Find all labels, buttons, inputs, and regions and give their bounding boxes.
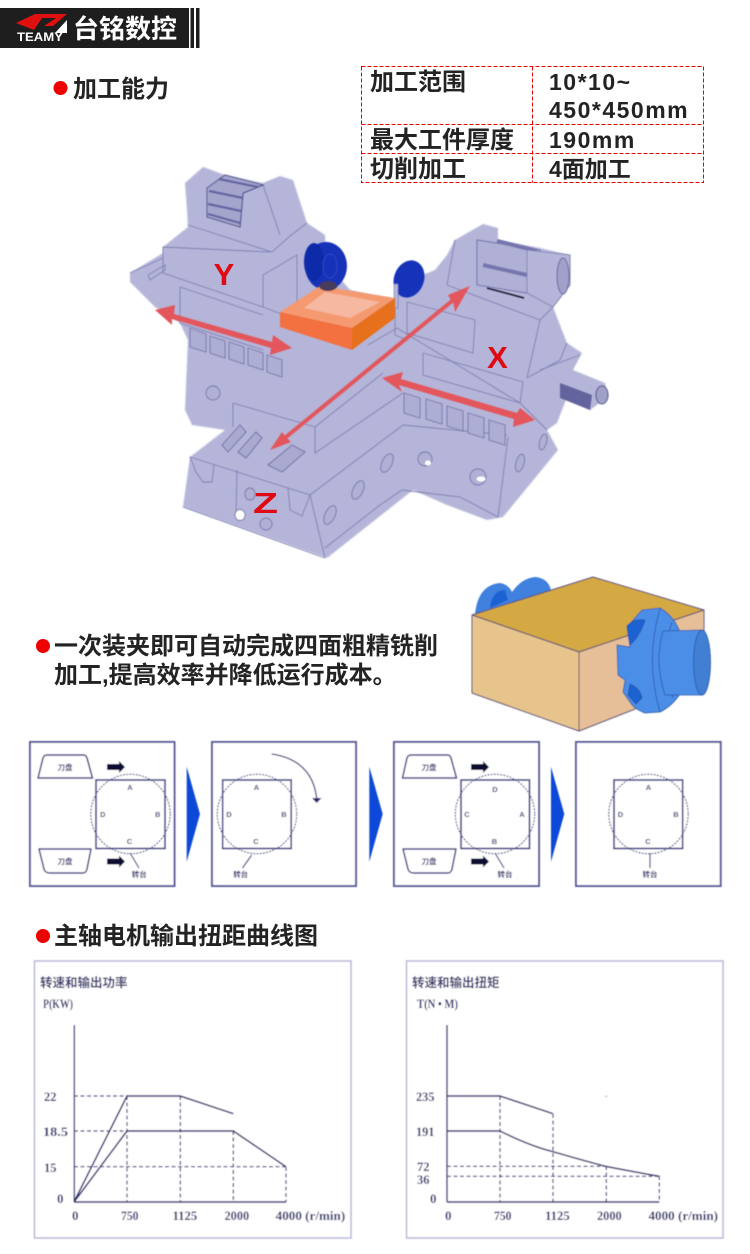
chart: speed vs output power <box>34 961 351 1238</box>
torque tick labels: 0 <box>430 1191 436 1206</box>
spec table: 4面加工 <box>549 156 631 182</box>
power tick labels: 18.5 <box>43 1124 69 1139</box>
box <box>472 577 704 731</box>
step 4 panel <box>576 742 721 886</box>
step 4 panel: B <box>673 810 679 819</box>
step 2 panel <box>212 742 356 886</box>
text block: one clamping benefit: 一次装夹即可自动完成四面粗精铣削 <box>54 633 438 660</box>
y-axis motor fins <box>207 175 263 227</box>
step 3 panel <box>394 742 539 886</box>
blue spindle chucks <box>304 242 430 308</box>
step 2 panel: A <box>254 783 260 792</box>
text block: one clamping benefit: 加工,提高效率并降低运行成本。 <box>54 662 397 689</box>
spec table: 加工范围 <box>370 69 466 96</box>
icon: logo mark <box>16 14 67 44</box>
y axis arrow <box>155 305 292 355</box>
power tick labels: 1125 <box>172 1208 198 1223</box>
power tick labels: 4000 (r/min) <box>276 1208 345 1223</box>
step 1 panel: A <box>127 783 133 792</box>
heading: torque curves: 主轴电机输出扭距曲线图 <box>54 923 318 950</box>
torque tick labels: 2000 <box>597 1208 622 1223</box>
base windows <box>190 328 505 445</box>
x axis arrow <box>382 372 535 427</box>
torque tick labels <box>416 1089 718 1223</box>
power tick labels: 0 <box>72 1208 78 1223</box>
brand name: 台铭数控 <box>73 14 177 44</box>
back cutter <box>475 577 551 614</box>
torque curves <box>447 1096 659 1176</box>
power tick labels: 22 <box>44 1089 56 1104</box>
arrow: step 3 to 4 <box>551 767 564 862</box>
power curves <box>74 1096 286 1202</box>
step 3 panel: 刀盘 <box>422 762 437 772</box>
chart: speed vs output power: 转速和输出功率 <box>40 975 128 990</box>
step 4 panel: 转台 <box>642 869 658 879</box>
step 2 panel: 转台 <box>233 869 249 879</box>
chart: speed vs output torque: 转速和输出扭矩 <box>412 975 500 990</box>
machine illustration: X <box>487 340 508 375</box>
machine body silhouette <box>130 167 608 558</box>
torque tick labels: 72 <box>417 1159 430 1174</box>
process flow diagrams <box>30 742 721 886</box>
axes and guides <box>447 1025 659 1202</box>
arrow: step 1 to 2 <box>187 767 200 862</box>
axis arrows <box>155 286 535 450</box>
z-way guide rails <box>222 425 305 472</box>
torque tick labels: 235 <box>416 1089 435 1104</box>
step 2 panel: C <box>253 837 259 846</box>
heading: machining capability: 加工能力 <box>73 76 169 103</box>
axes and guides <box>74 1025 286 1202</box>
z axis arrow <box>270 286 470 450</box>
step 1 panel: 刀盘 <box>58 856 73 866</box>
step 1 panel: D <box>100 810 106 819</box>
torque tick labels: 36 <box>417 1172 430 1187</box>
spec table: 最大工件厚度 <box>370 127 514 154</box>
workpiece and cutter illustration <box>472 577 710 731</box>
machine detail lines <box>130 185 580 558</box>
base holes <box>206 386 548 530</box>
power tick labels: 2000 <box>224 1208 249 1223</box>
orange workpiece <box>280 281 395 350</box>
torque tick labels: 750 <box>494 1208 512 1223</box>
x-axis motor <box>477 240 608 410</box>
power tick labels <box>43 1089 345 1223</box>
power tick labels: 750 <box>121 1208 138 1223</box>
chart: speed vs output torque <box>406 961 723 1238</box>
text block: one clamping benefit <box>36 633 438 689</box>
chart: speed vs output torque: T(N • M) <box>417 996 458 1011</box>
spec table: 450*450mm <box>549 97 689 123</box>
spec table: 切削加工 <box>370 156 466 183</box>
step 3 panel: C <box>464 810 470 819</box>
step 1 panel: 刀盘 <box>58 762 73 772</box>
icon: logo mark: TEAMY <box>17 32 63 44</box>
step 3 panel: D <box>492 785 498 794</box>
arrow: step 2 to 3 <box>369 767 383 862</box>
step 1 panel: B <box>155 810 161 819</box>
torque tick labels: 1125 <box>545 1208 570 1223</box>
step 3 panel: B <box>492 837 498 846</box>
step 1 panel: C <box>127 837 133 846</box>
axis letters: Y <box>214 257 235 292</box>
chart: speed vs output power: P(KW) <box>43 996 73 1011</box>
front cutter <box>617 608 710 713</box>
step 2 panel: D <box>226 810 232 819</box>
torque tick labels: 4000 (r/min) <box>648 1208 718 1223</box>
step 3 panel: A <box>519 810 525 819</box>
machine illustration <box>130 167 608 558</box>
step 1 panel <box>30 742 174 886</box>
torque tick labels: 0 <box>445 1208 452 1223</box>
header: brand bar <box>0 8 200 48</box>
step 4 panel: A <box>646 783 652 792</box>
step 3 panel: 刀盘 <box>422 856 437 866</box>
torque tick labels: 191 <box>416 1124 434 1139</box>
spec table <box>362 66 704 183</box>
power tick labels: 15 <box>44 1160 57 1175</box>
step 1 panel: 转台 <box>132 869 147 879</box>
machine illustration: Z <box>253 488 278 520</box>
spec table: 10*10~ <box>549 69 632 95</box>
spec table: 190mm <box>549 127 636 153</box>
step 3 panel: 转台 <box>498 869 513 879</box>
step 2 panel: B <box>281 810 287 819</box>
power tick labels: 0 <box>57 1191 64 1206</box>
step 4 panel: C <box>645 837 651 846</box>
step 4 panel: D <box>618 810 624 819</box>
